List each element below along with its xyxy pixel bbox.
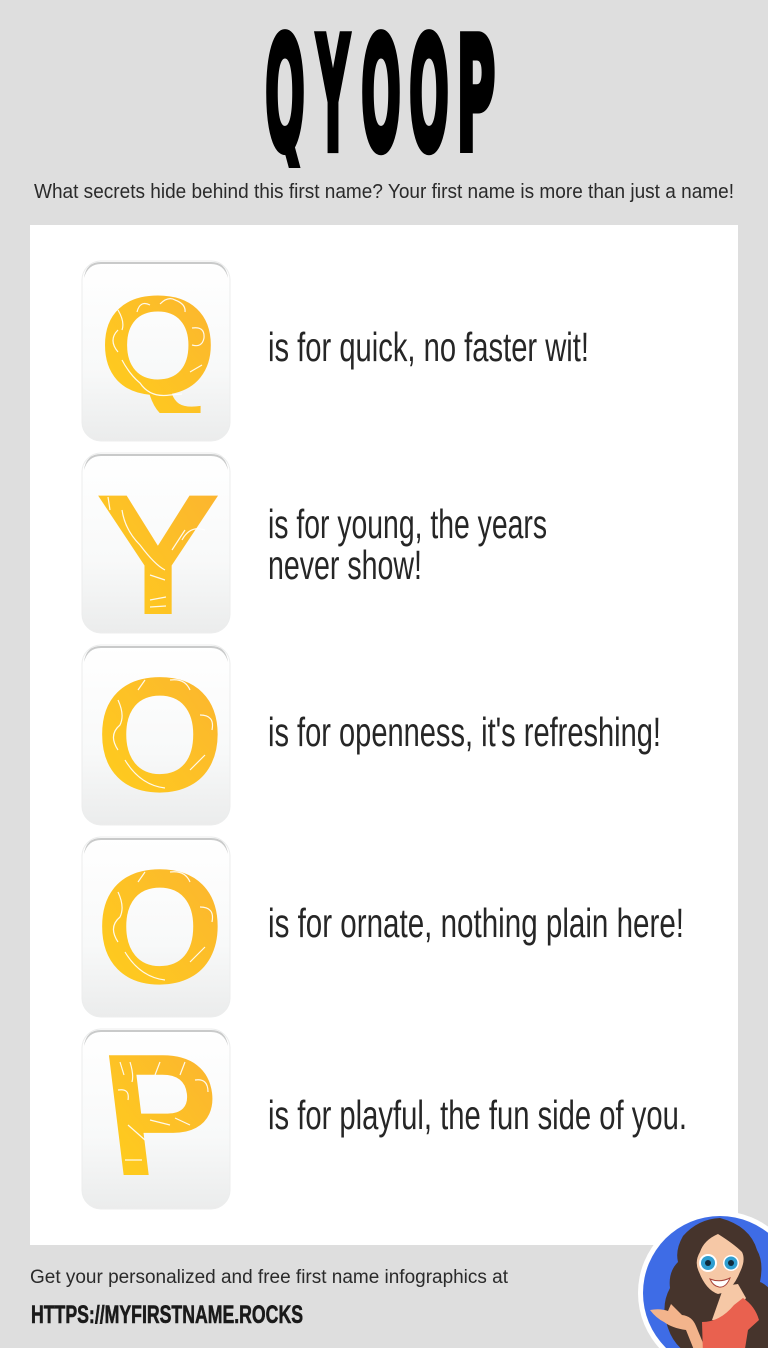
row: letter O bbox=[82, 643, 661, 826]
text: quick: is for quick, no faster wit! bbox=[268, 324, 589, 370]
title: Q bbox=[265, 5, 305, 187]
icon: letter O tile: O bbox=[95, 643, 225, 826]
row: letter O bbox=[82, 835, 684, 1018]
letter Y: Y bbox=[95, 459, 221, 651]
footer url: HTTPS://MYFIRSTNAME.ROCKS bbox=[31, 1301, 303, 1329]
title: Y bbox=[316, 5, 350, 187]
title: O bbox=[361, 5, 401, 187]
title: P bbox=[457, 6, 495, 186]
icon: letter Q tile: Q bbox=[99, 267, 217, 425]
row: letter Q bbox=[82, 261, 589, 441]
row: letter Y bbox=[82, 453, 547, 651]
icon: letter O tile: O bbox=[95, 835, 225, 1018]
panel: letter meanings bbox=[30, 225, 738, 1245]
row: letter P bbox=[82, 1019, 687, 1213]
text: young bbox=[268, 501, 547, 588]
icon: letter Y tile bbox=[82, 453, 230, 651]
footer call to action: Get your personalized and free first name infographics at bbox=[30, 1267, 509, 1288]
text: young: never show! bbox=[268, 542, 422, 588]
subtitle: What secrets hide behind this first name? Your first name is more than just a name! bbox=[34, 181, 734, 203]
avatar bbox=[638, 1211, 768, 1348]
icon: letter P tile: P bbox=[93, 1019, 233, 1213]
title: O bbox=[409, 5, 449, 187]
title bbox=[266, 29, 495, 168]
text: young: is for young, the years bbox=[268, 501, 547, 547]
